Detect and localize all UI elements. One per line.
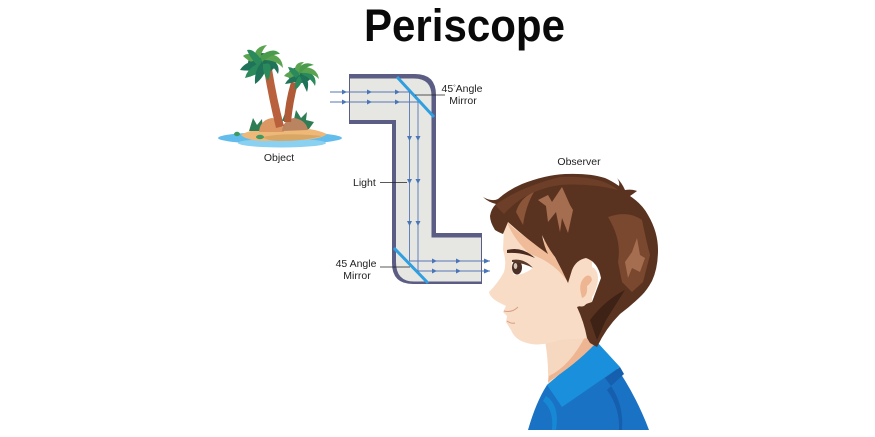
mouth	[504, 307, 518, 323]
title: Periscope	[364, 0, 565, 51]
water	[218, 132, 342, 148]
collar	[547, 342, 620, 407]
mirror: bottom	[394, 248, 428, 283]
label: top mirror: °	[453, 85, 456, 91]
sand island	[241, 128, 327, 141]
palm crown: left	[240, 45, 283, 84]
label: light: Light	[353, 177, 376, 189]
hair	[483, 174, 658, 347]
skin shadow under fringe	[507, 222, 570, 285]
neck	[544, 335, 595, 384]
ear	[575, 266, 598, 306]
label: top mirror: 45	[442, 83, 453, 95]
face	[489, 205, 592, 344]
icon: palm tree island	[218, 45, 342, 148]
label: Object: Object	[264, 152, 294, 164]
observer: boy in profile	[483, 174, 658, 430]
label: Observer: Observer	[557, 156, 601, 168]
eyebrow	[507, 249, 535, 258]
rocks	[259, 118, 308, 132]
label: light	[353, 177, 407, 189]
palm crown: right	[284, 62, 319, 92]
light rays	[330, 90, 490, 274]
label: top mirror: Mirror	[449, 95, 477, 107]
shirt	[528, 342, 649, 430]
grass	[234, 110, 314, 139]
label: top mirror: Angle	[456, 83, 483, 95]
label: bottom mirror: 45 Angle	[336, 258, 377, 270]
hair highlights	[495, 177, 650, 340]
label: bottom mirror: Mirror	[343, 270, 371, 282]
trunks	[264, 69, 298, 128]
label: bottom mirror	[336, 258, 410, 282]
label: top mirror	[415, 83, 483, 107]
eye	[512, 260, 533, 275]
ray arrows	[342, 90, 490, 274]
periscope tube	[349, 74, 482, 284]
mirror: top	[397, 77, 434, 117]
